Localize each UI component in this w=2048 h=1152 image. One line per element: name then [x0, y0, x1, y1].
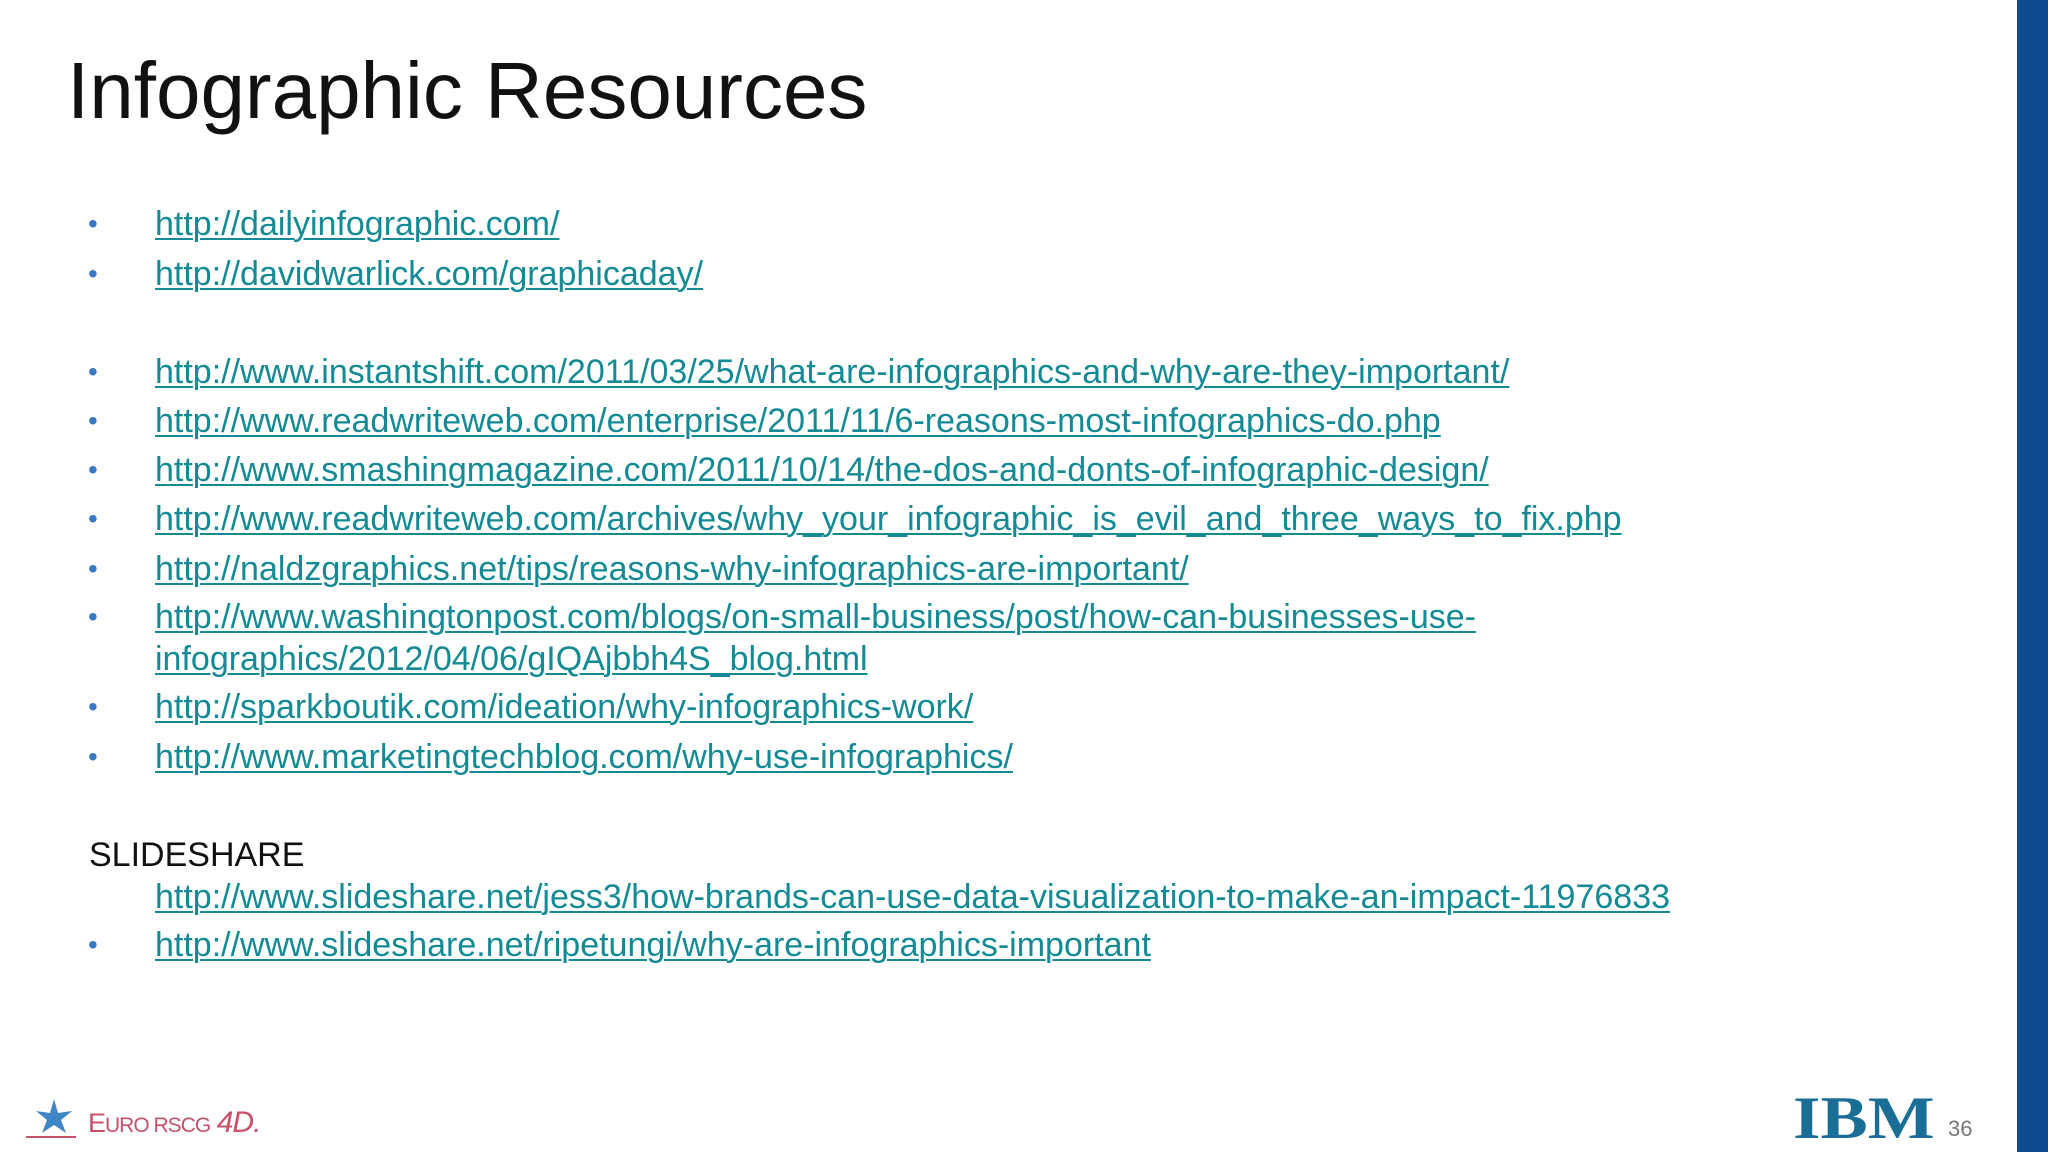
- link list: •: [88, 258, 98, 289]
- title: Infographic Resources: [67, 46, 867, 135]
- link list: http://sparkboutik.com/ideation/why-infographics-work/: [155, 688, 973, 726]
- link list: •: [88, 741, 98, 772]
- link list: http://www.readwriteweb.com/enterprise/2011/11/6-reasons-most-infographics-do.php: [155, 402, 1441, 440]
- link list: http://www.instantshift.com/2011/03/25/what-are-infographics-and-why-are-they-important/: [155, 353, 1509, 391]
- link list: •: [88, 356, 98, 387]
- link list: http://www.washingtonpost.com/blogs/on-small-business/post/how-can-businesses-use-: [155, 598, 1476, 636]
- link list: •: [88, 929, 98, 960]
- right side bar: [2017, 0, 2048, 1152]
- link list: •: [88, 454, 98, 485]
- link list: http://dailyinfographic.com/: [155, 205, 559, 243]
- link list: http://naldzgraphics.net/tips/reasons-why-infographics-are-important/: [155, 550, 1189, 588]
- link list: [88, 205, 1670, 964]
- link list: •: [88, 503, 98, 534]
- link list: •: [88, 208, 98, 239]
- logo: IBM: IBM: [1793, 1085, 1935, 1151]
- logo: Euro RSCG 4D: [26, 1099, 260, 1139]
- link list: •: [88, 405, 98, 436]
- link list: http://davidwarlick.com/graphicaday/: [155, 255, 703, 293]
- link list: infographics/2012/04/06/gIQAjbbh4S_blog.html: [155, 640, 868, 678]
- link list: http://www.smashingmagazine.com/2011/10/14/the-dos-and-donts-of-infographic-design/: [155, 451, 1489, 489]
- link list: •: [88, 601, 98, 632]
- link list: http://www.slideshare.net/jess3/how-brands-can-use-data-visualization-to-make-an-impact-11976833: [155, 878, 1670, 916]
- slideshare heading: SLIDESHARE: [89, 836, 304, 874]
- link list: •: [88, 691, 98, 722]
- link list: http://www.readwriteweb.com/archives/why_your_infographic_is_evil_and_three_ways_to_fix.php: [155, 500, 1622, 538]
- link list: •: [88, 553, 98, 584]
- logo: Euro RSCG 4D: EURO RSCG 4D.: [88, 1106, 260, 1139]
- link list: http://www.slideshare.net/ripetungi/why-are-infographics-important: [155, 926, 1151, 964]
- link list: http://www.marketingtechblog.com/why-use-infographics/: [155, 738, 1013, 776]
- page number: 36: [1948, 1116, 1972, 1141]
